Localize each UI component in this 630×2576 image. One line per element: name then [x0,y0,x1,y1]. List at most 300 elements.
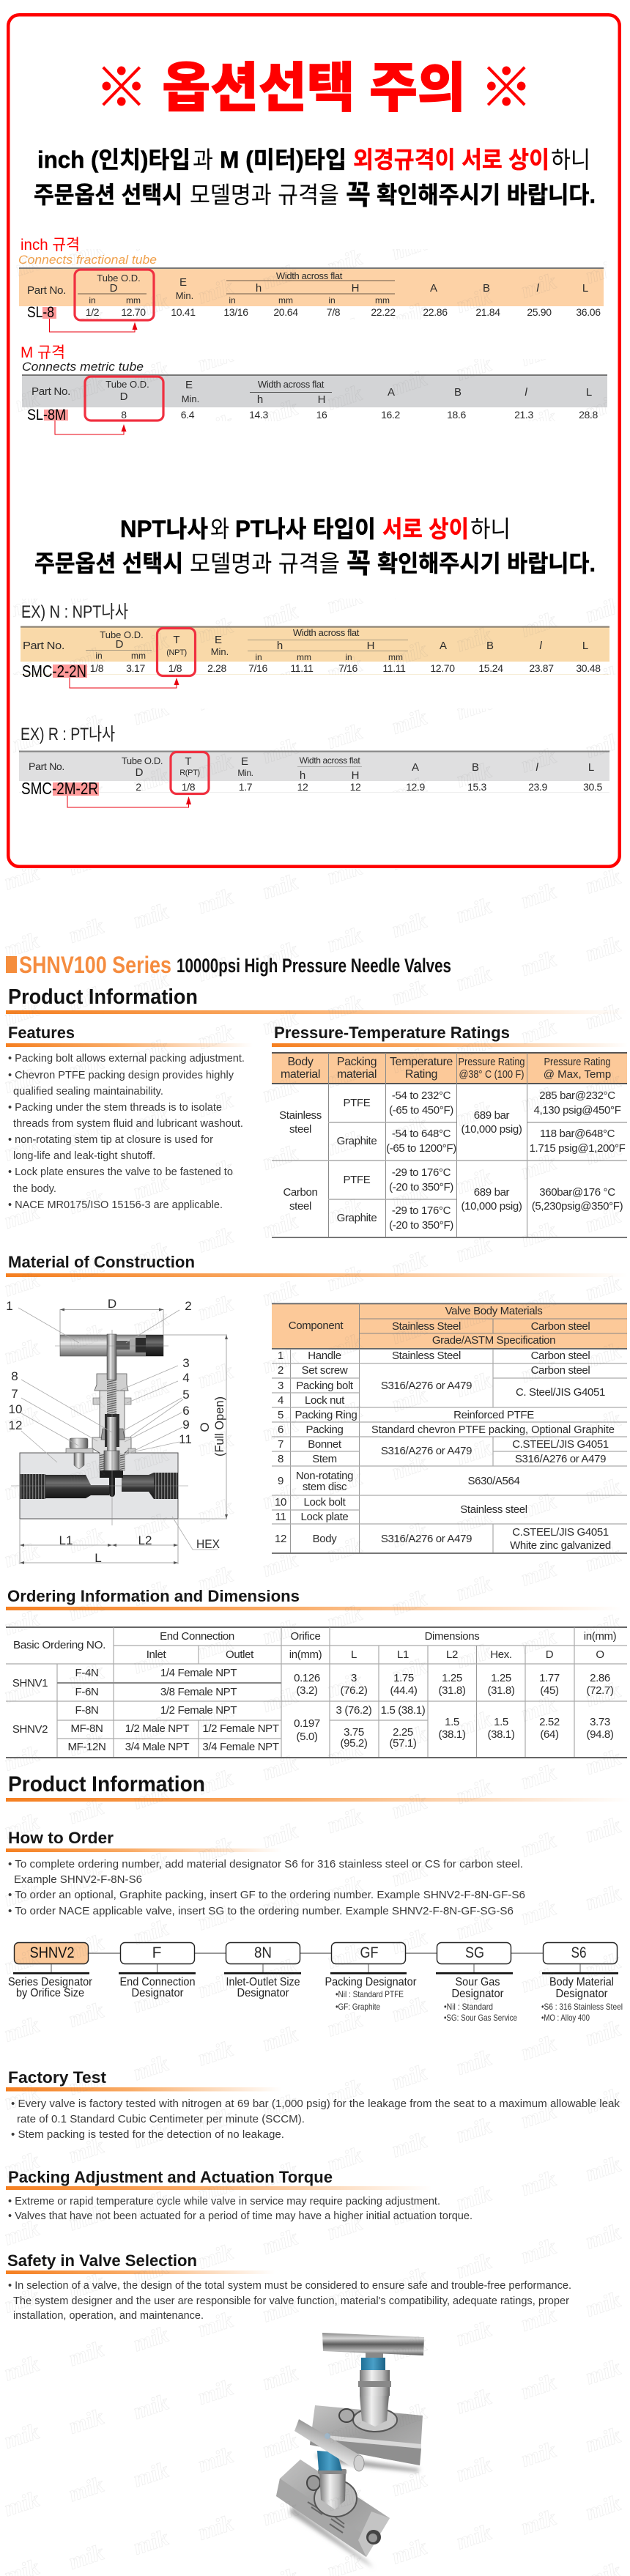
table: NPT example SMC-2-2N: 1/8 [168,662,182,674]
table: metric spec SL-8M: B [454,386,462,399]
heading: packing adjustment and actuation torque: Packing Adjustment and Actuation Torque [8,2168,333,2186]
label: packing designator [325,1976,417,2012]
leader lines [18,1308,218,1550]
example label: N NPT thread: EX) N : NPT나사 [21,602,128,622]
materials table [272,1303,627,1554]
table: inch spec SL-8: in [229,295,236,306]
table: inch spec SL-8: 13/16 [223,306,248,318]
code box: end connection: F [152,1944,161,1961]
materials table: Carbon steel [531,1350,590,1362]
features list: the body. [13,1182,56,1195]
ordering and dimensions table: (44.4) [390,1684,418,1697]
table: NPT example SMC-2-2N: 23.87 [529,662,554,674]
table: NPT example SMC-2-2N: Tube O.D. [100,629,144,640]
label: body material designator: •MO : Alloy 400 [541,2013,590,2023]
table: NPT example SMC-2-2N: Width across flat [293,627,360,638]
ordering and dimensions table: 3.75 [344,1726,364,1739]
how to order text: • To complete ordering number, add material designator S6 for 316 stainless steel or CS for carbon steel. [8,1858,523,1870]
table: NPT example SMC-2-2N: H [367,640,374,652]
table: NPT example SMC-2-2N: (NPT) [166,648,187,657]
part number SL-8M: SL-8M [27,407,66,423]
pressure-temperature table: Packing [337,1056,377,1068]
series title: 10000psi High Pressure Needle Valves [177,955,451,977]
pressure-temperature table: (-65 to 450°F) [389,1104,453,1117]
series title: SHNV100 Series [19,952,171,978]
table: metric spec SL-8M: 16.2 [381,409,400,421]
materials table: Packing bolt [296,1380,354,1392]
lock bolt and plate [66,1438,136,1469]
table: metric spec SL-8M: h [257,393,263,406]
table: NPT example SMC-2-2N: mm [388,652,403,662]
notice text: NPT vs PT: 하니 [470,516,511,542]
ordering and dimensions table: Basic Ordering NO. [13,1639,105,1651]
ordering and dimensions table: Inlet [147,1648,166,1661]
part number SL-8: SL-8 [27,304,54,321]
notice text: NPT vs PT: 와 [210,516,229,542]
materials table: 11 [275,1511,286,1523]
features list: threads from system fluid and lubricant washout. [13,1117,243,1130]
table: PT example SMC-2M-2R: Part No. [29,760,64,772]
dimension labels: D [108,1297,116,1311]
table: NPT example SMC-2-2N: T [173,634,180,646]
materials table: Bonnet [308,1438,342,1451]
table: inch spec SL-8: 1/2 [86,306,100,318]
part numbers: 11 [179,1432,192,1446]
materials table: Grade/ASTM Specification [432,1334,555,1347]
safety text: installation, operation, and maintenance. [13,2309,204,2322]
ordering and dimensions table: (72.7) [586,1684,614,1697]
ordering and dimensions table: F-4N [75,1667,98,1679]
table: inch spec SL-8: h [256,282,262,295]
table: metric spec SL-8M: 8 [121,409,127,421]
ordering and dimensions table: 3.73 [590,1716,610,1728]
table: inch spec SL-8: mm [375,295,390,306]
materials table: 5 [278,1409,284,1421]
part numbers: 12 [9,1418,22,1432]
label: body material designator [541,1976,623,2023]
heading: pressure-temperature ratings [272,1024,628,1047]
table: metric spec SL-8M: D [120,391,128,403]
features list: • Chevron PTFE packing design provides highly [8,1069,234,1081]
table: PT example SMC-2M-2R: 1/8 [182,781,196,793]
materials table: Body [313,1533,337,1545]
pressure-temperature table: (-20 to 350°F) [389,1181,453,1193]
panel: pressure-temperature ratings [272,1024,628,1238]
notice text: inch vs metric: M (미터)타입 [220,147,346,173]
ordering and dimensions table [6,1626,627,1758]
arrow: part number to thread size [70,678,179,688]
panel: safety in valve selection [6,2251,571,2322]
table: PT example SMC-2M-2R: l [536,761,538,774]
part numbers: 9 [182,1418,190,1432]
part numbers: 5 [182,1388,190,1402]
table: inch spec SL-8: 36.06 [576,306,601,318]
pressure-temperature table: Pressure Rating [459,1056,525,1068]
table: metric spec SL-8M: 21.3 [514,409,533,421]
materials table: Component [289,1320,344,1332]
part numbers: 6 [182,1404,190,1418]
arrow: part number to tube size [50,319,138,332]
ordering and dimensions table: 0.197 [294,1717,320,1730]
table: PT example SMC-2M-2R: 12 [297,781,308,793]
table: PT example SMC-2M-2R: 15.3 [467,781,486,793]
dimension labels: O [198,1422,212,1432]
materials table: S316/A276 or A479 [381,1533,472,1545]
table: metric spec SL-8M: 14.3 [249,409,268,421]
materials table: Carbon steel [531,1364,590,1377]
table: NPT example SMC-2-2N: mm [297,652,311,662]
materials table: 3 [278,1380,284,1392]
materials table: Non-rotating [296,1470,353,1482]
label: end connection: End Connection [120,1976,195,1988]
heading: factory test: Factory Test [8,2068,107,2087]
table: inch spec SL-8: L [582,282,588,295]
ordering and dimensions table: L2 [446,1648,458,1661]
part numbers: 3 [182,1356,190,1370]
pressure-temperature table [272,1052,627,1238]
part numbers [6,1299,192,1446]
label: end connection: Designator [132,1987,184,1999]
pressure-temperature table: (-20 to 350°F) [389,1219,453,1232]
pressure-temperature table: (5,230psig@350°F) [532,1200,623,1213]
features list: long-life and leak-tight shutoff. [13,1150,155,1162]
table: PT example SMC-2M-2R: 1.7 [239,781,253,793]
table: inch spec SL-8: Part No. [27,284,66,297]
ordering and dimensions table: SHNV2 [12,1723,48,1736]
dimension labels: (Full Open) [212,1396,226,1457]
part numbers: 2 [185,1299,192,1313]
features list: • non-rotating stem tip at closure is used for [8,1133,213,1146]
table: inch spec SL-8: Min. [176,290,193,301]
valve stem [100,1377,123,1497]
materials table: Set screw [302,1364,348,1377]
pressure-temperature table: Body [287,1056,314,1068]
materials table: Stem [312,1453,337,1465]
ordering and dimensions table: SHNV1 [12,1677,48,1689]
table: inch spec SL-8: in [328,295,336,306]
notice text: inch vs metric: 외경규격이 서로 상이 [353,147,549,173]
notice text: NPT vs PT: 서로 상이 [382,516,469,542]
upper valve [310,2333,424,2472]
packing adjustment text: • Valves that have not been actuated for a period of time may have a higher initial actuation torque. [8,2210,472,2222]
code box: series [15,1943,88,1964]
code box: sour gas: SG [465,1944,484,1961]
table: PT example SMC-2M-2R: Tube O.D. [122,755,163,766]
table: inch spec SL-8: 12.70 [121,306,146,318]
ordering and dimensions table: 1/2 Female NPT [160,1704,237,1717]
label: packing designator: •GF: Graphite [336,2002,380,2012]
table: NPT example SMC-2-2N: h [277,640,283,652]
code box: body material: S6 [571,1944,586,1961]
pressure-temperature table: -54 to 648°C [392,1128,451,1140]
table: PT example SMC-2M-2R: Min. [237,768,253,778]
features list [8,1052,245,1211]
table: inch spec SL-8: mm [278,295,293,306]
ordering and dimensions table: in(mm) [289,1648,322,1661]
highlight box: T R(PT) [171,752,209,794]
pressure-temperature table: Graphite [337,1135,377,1147]
heading: packing adjustment and actuation torque [6,2168,432,2190]
panel: features [6,1024,253,1211]
arrow: part number to tube size [55,421,126,434]
pressure-temperature table: @38° C (100 F) [459,1068,525,1081]
heading: product information [6,985,628,1014]
part numbers: 8 [11,1369,18,1383]
heading: safety in valve selection: Safety in Valve Selection [7,2251,197,2270]
heading: product information 2 [6,1772,630,1802]
table: NPT example SMC-2-2N: 7/16 [338,662,357,674]
table: NPT example SMC-2-2N: 30.48 [576,662,601,674]
ordering and dimensions table: 3 [351,1672,357,1684]
product photo: two needle valves [276,2333,424,2568]
table: NPT example SMC-2-2N: 1/8 [90,662,104,674]
materials table: Lock plate [301,1511,348,1523]
packing adjustment text: • Extreme or rapid temperature cycle while valve in service may require packing adjustment. [8,2195,440,2207]
table: metric spec SL-8M: L [586,386,592,399]
pressure-temperature table: PTFE [344,1174,371,1186]
ordering and dimensions table: 1.5 [445,1716,459,1728]
table: inch spec SL-8: 22.22 [371,306,396,318]
pressure-temperature table: material [337,1068,377,1081]
table: PT example SMC-2M-2R: h [300,769,305,782]
highlight box: tube O.D. [85,377,163,421]
table: NPT example SMC-2-2N: 3.17 [126,662,145,674]
table: metric spec SL-8M: l [525,386,527,399]
label: sour gas designator: •Nil : Standard [444,2002,493,2012]
table: inch spec SL-8: 21.84 [475,306,500,318]
code box: size [226,1943,300,1964]
ordering and dimensions table: 1.25 [491,1672,511,1684]
ordering and dimensions table: (3.2) [296,1684,318,1697]
valve cross-section diagram [6,1297,228,1565]
inch spec label: inch 규격 [21,237,80,253]
ordering and dimensions table: Hex. [490,1648,512,1661]
features list: qualified sealing maintainability. [13,1085,163,1098]
lower valve [276,2419,390,2568]
notice text: NPT vs PT: 주문옵션 선택시 [34,550,183,577]
ordering and dimensions table: (38.1) [438,1728,466,1741]
table: metric spec SL-8M: E [185,379,193,391]
label: inlet-outlet size: Designator [237,1987,289,1999]
materials table: 6 [278,1424,284,1436]
part numbers: 4 [182,1371,190,1385]
features list: • NACE MR0175/ISO 15156-3 are applicable. [8,1199,223,1211]
pressure-temperature table: 4,130 psig@450°F [533,1104,621,1117]
ordering and dimensions table: 1.77 [539,1672,560,1684]
notice text: inch vs metric: 확인해주시기 바랍니다. [377,182,596,208]
dimension labels: L1 [59,1533,73,1547]
ordering and dimensions table: (95.2) [340,1737,368,1750]
table: PT example SMC-2M-2R: B [472,761,479,774]
table: PT example SMC-2M-2R: E [241,755,248,768]
inch spec label: Connects fractional tube [18,253,157,267]
safety text: The system designer and the user are responsible for valve function, material's compatibility, adequate ratings, proper [13,2295,569,2307]
heading: pressure-temperature ratings: Pressure-Temperature Ratings [274,1024,510,1042]
label: sour gas designator [444,1976,517,2023]
materials table: 8 [278,1453,284,1465]
table: NPT example SMC-2-2N: 15.24 [478,662,503,674]
code box: packing: GF [360,1944,378,1961]
table: inch spec SL-8: 7/8 [327,306,341,318]
table: NPT example SMC-2-2N: E [215,634,222,646]
table: NPT example SMC-2-2N: 11.11 [290,662,314,674]
notice text: inch vs metric: 꼭 [346,180,371,211]
pressure-temperature table: @ Max, Temp [544,1068,611,1081]
table: inch spec SL-8: l [536,282,539,295]
table: metric spec SL-8M: H [318,393,325,406]
ordering and dimensions table: (31.8) [438,1684,466,1697]
connector lines [89,1953,543,1954]
table: NPT example SMC-2-2N: A [440,640,447,652]
table: NPT example SMC-2-2N: l [539,640,542,652]
notice text: inch vs metric: 모델명과 규격을 [190,182,339,208]
table: NPT example SMC-2-2N: mm [131,651,146,661]
part number SMC-2-2N: SMC-2-2N [22,662,86,681]
materials table: C.STEEL/JIS G4051 [512,1438,609,1451]
factory test text: • Stem packing is tested for the detection of no leakage. [11,2128,284,2141]
code box: series: SHNV2 [29,1944,75,1961]
ordering and dimensions table: F-6N [75,1686,98,1698]
ordering and dimensions table: (64) [540,1728,559,1741]
table: metric spec SL-8M: Min. [182,393,199,404]
how to order text: Example SHNV2-F-8N-S6 [14,1873,142,1886]
materials table: C.STEEL/JIS G4051 [512,1526,609,1539]
metric spec label: Connects metric tube [22,360,144,374]
notice text: inch vs metric: inch (인치)타입 [37,147,190,173]
label: series designator: Series Designator [8,1976,93,1988]
table: PT example SMC-2M-2R: 2 [136,781,141,793]
ordering and dimensions table: 0.126 [294,1672,320,1684]
table: PT example SMC-2M-2R [19,750,609,807]
table: metric spec SL-8M: 18.6 [447,409,466,421]
code box: packing [331,1943,406,1964]
table: metric spec SL-8M: Part No. [32,385,70,398]
label: series designator [8,1976,93,1999]
materials table: 7 [278,1438,284,1451]
materials table: S630/A564 [467,1475,520,1487]
pressure-temperature table: steel [289,1200,311,1213]
series title [6,952,451,978]
label: inlet-outlet size: Inlet-Outlet Size [226,1976,300,1988]
table: PT example SMC-2M-2R: H [352,769,359,782]
safety text [8,2279,571,2322]
materials table: Stainless steel [460,1503,527,1516]
part number SMC-2M-2R: SMC-2M-2R [21,779,98,798]
pressure-temperature table: (10,000 psig) [461,1123,522,1136]
factory test text: • Every valve is factory tested with nitrogen at 69 bar (1,000 psig) for the leakage from the seat to a maximum allowable leak [11,2098,620,2110]
ordering and dimensions table: 1.75 [393,1672,414,1684]
heading: safety in valve selection [6,2251,275,2274]
heading: product information: Product Information [8,985,198,1009]
pressure-temperature table: 689 bar [474,1186,510,1199]
ordering and dimensions table: Orifice [291,1630,320,1643]
pressure-temperature table: Pressure Rating [544,1056,611,1068]
factory test text: rate of 0.1 Standard Cubic Centimeter per minute (SCCM). [17,2113,305,2125]
materials table: 2 [278,1364,284,1377]
panel: factory test [6,2068,620,2141]
ordering and dimensions table: (76.2) [340,1684,368,1697]
how to order text [8,1858,525,1917]
ordering and dimensions table: F-8N [75,1704,98,1717]
materials table: S316/A276 or A479 [381,1380,472,1392]
dimension labels: L [94,1551,102,1565]
ordering and dimensions table: 3/4 Male NPT [125,1741,189,1753]
part numbers: 10 [9,1402,22,1416]
how to order text: • To order NACE applicable valve, insert SG to the ordering number. Example SHNV2-F-8N-GF-SG-S6 [8,1905,514,1917]
materials table: Packing Ring [294,1409,357,1421]
table: metric spec SL-8M: 28.8 [579,409,598,421]
dimension lines [20,1309,228,1564]
pressure-temperature table: 689 bar [474,1109,510,1122]
center lines [11,1330,188,1525]
heading: features [6,1024,253,1047]
materials table: S316/A276 or A479 [515,1453,606,1465]
materials table: stem disc [303,1481,347,1493]
table: metric spec SL-8M: Width across flat [258,379,325,390]
table: inch spec SL-8 [19,267,604,332]
notice title: ※ 옵션선택 주의 ※ [95,59,533,118]
label: sour gas designator: •SG: Sour Gas Service [444,2013,517,2023]
table: metric spec SL-8M: 16 [316,409,327,421]
table: inch spec SL-8: 10.41 [171,306,196,318]
materials table: 12 [275,1533,286,1545]
materials table: Handle [308,1350,341,1362]
metric spec label: M 규격 [21,344,65,361]
table: NPT example SMC-2-2N: 7/16 [248,662,267,674]
ordering and dimensions table: 3/8 Female NPT [160,1686,237,1698]
table: PT example SMC-2M-2R: 30.5 [583,781,602,793]
ordering and dimensions table: MF-12N [67,1741,106,1753]
table: NPT example SMC-2-2N: Min. [211,646,229,657]
table: PT example SMC-2M-2R: D [136,766,144,779]
table: PT example SMC-2M-2R: 23.9 [528,781,547,793]
ordering and dimensions table: L1 [397,1648,409,1661]
highlight box: T NPT [157,629,195,676]
notice text: NPT vs PT: 모델명과 규격을 [190,550,340,577]
materials table: Reinforced PTFE [453,1409,534,1421]
label: body material designator: Body Material [549,1976,614,1988]
table: NPT example SMC-2-2N: D [116,638,124,651]
materials table: 1 [278,1350,284,1362]
table: inch spec SL-8: E [179,276,187,289]
label: sour gas designator: Sour Gas [456,1976,500,1988]
table: metric spec SL-8M [22,374,607,434]
table: NPT example SMC-2-2N: in [345,652,352,662]
part numbers: 1 [6,1299,13,1313]
notice text: NPT vs PT: PT나사 타입이 [235,516,376,542]
factory test text [11,2098,620,2141]
table: NPT example SMC-2-2N [21,626,609,688]
features list: • Packing under the stem threads is to isolate [8,1101,222,1114]
ordering and dimensions table: (57.1) [389,1737,417,1750]
table: PT example SMC-2M-2R: R(PT) [179,769,200,777]
arrow: part number to thread size [67,796,191,807]
materials table: 10 [275,1496,286,1509]
table: NPT example SMC-2-2N: in [255,652,262,662]
ordering and dimensions table: D [546,1648,554,1661]
heading: how to order [6,1829,282,1852]
handle [60,1334,163,1380]
materials table: C. Steel/JIS G4051 [516,1386,605,1399]
code box: size: 8N [254,1944,272,1961]
pressure-temperature table: Stainless [279,1109,322,1122]
materials table: Valve Body Materials [445,1305,542,1317]
table: inch spec SL-8: B [483,282,490,295]
table: inch spec SL-8: A [430,282,437,295]
ordering and dimensions table: MF-8N [70,1722,103,1735]
label: series designator: by Orifice Size [16,1987,84,1999]
notice text: NPT vs PT [34,516,596,580]
